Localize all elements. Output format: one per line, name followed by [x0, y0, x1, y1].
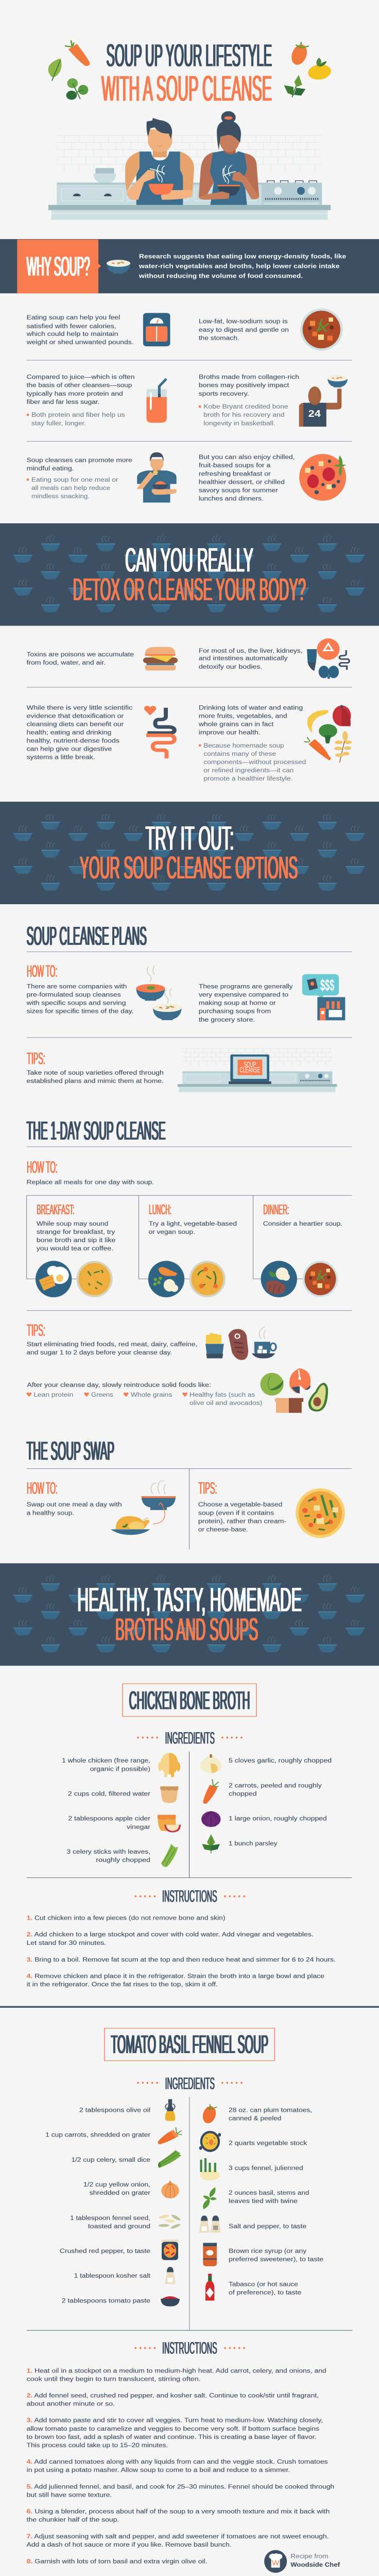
panel: swap how to: Swap out one meal a day with [27, 1501, 122, 1508]
instructions: 1. Cut chicken into a few pieces (do not remove bone and skin) [27, 1914, 225, 1921]
ingredient: fennel seed: toasted and ground [88, 2223, 150, 2230]
heading: instructions: INSTRUCTIONS [162, 2339, 217, 2358]
instructions [27, 1914, 314, 1946]
heading: ingredients: INGREDIENTS [165, 1729, 214, 1748]
text: compared to juice [27, 374, 134, 427]
ingredient: chicken [62, 1753, 180, 1777]
icon: vegetable yellow soup [190, 1261, 226, 1297]
ingredient: fennel seed: 1 tablespoon fennel seed, [70, 2214, 150, 2222]
icon: kale leaf [48, 58, 62, 81]
text: expensive: very expensive compared to [199, 991, 288, 998]
instructions: 6. Using a blender, process about half of the soup to a very smooth texture and mix it back with [27, 2507, 330, 2515]
ingredient: tomato paste [62, 2296, 180, 2307]
section: hero and why soup [0, 38, 379, 293]
instructions: 5. Add julienned fennel, and basil, and cook for 25–30 minutes. Fennel should be cooked through [27, 2483, 334, 2490]
banner: try it out: TRY IT OUT: [146, 820, 234, 857]
text: compared to juice: Compared to juice—which is often [27, 374, 134, 380]
text: expensive: making soup at home or [199, 999, 276, 1006]
instructions: allow tomato paste to caramelize and veggies to become very soft. If bottom surface begins [27, 2425, 320, 2432]
ingredient: carrots: 2 carrots, peeled and roughly [229, 1782, 322, 1789]
text: water, fruits, vegetables: Because homemade soup [203, 742, 284, 749]
text: broths: Broths made from collagen-rich [199, 374, 299, 380]
text: compared to juice: fiber and far less sugar. [27, 398, 99, 405]
banner: try it out [0, 802, 379, 904]
text: little scientific evidence: evidence that detoxification or [27, 712, 124, 719]
section: cleanse plans and 1-day cleanse [26, 965, 352, 1297]
banner: healthy tasty homemade [0, 1563, 379, 1666]
panel: swap how to: a healthy soup. [27, 1509, 74, 1516]
text: broths [199, 374, 299, 427]
text: little scientific evidence: health; eating and drinking [27, 729, 111, 736]
text: little scientific evidence [27, 704, 133, 761]
heading: ingredients [137, 1729, 243, 1748]
icon: vegetable soup [300, 309, 343, 351]
text: chilled soups: fruit-based soups for a [199, 462, 271, 469]
panel: breakfast: strange for breakfast, try [37, 1228, 115, 1235]
instructions continued: 4. Remove chicken and place it in the refrigerator. Strain the broth into a large bowl and place [27, 1972, 324, 1979]
text: chilled soups: savory soups for summer [199, 486, 278, 494]
text: satisfied [26, 314, 134, 346]
icon: chilled fruit soup [299, 454, 346, 501]
credit: woodside chef: W [272, 2560, 279, 2567]
text: water, fruits, vegetables: components—without processed [203, 758, 306, 766]
ingredient: carrots [203, 1779, 322, 1804]
instructions: 2. Add chicken to a large stockpot and cover with cold water. Add vinegar and vegetables. [27, 1931, 314, 1938]
text: chilled soups [199, 453, 295, 502]
illustration: woman eating soup [199, 111, 259, 205]
text: liver and kidneys: and intestines automatically [199, 655, 288, 662]
text: liver and kidneys: detoxify our bodies. [199, 663, 262, 670]
ingredient: onion [201, 1811, 327, 1827]
ingredient: salt and pepper: Salt and pepper, to taste [229, 2223, 306, 2230]
ingredient: olive oil: 2 tablespoons olive oil [79, 2106, 150, 2113]
panel: breakfast [37, 1201, 115, 1252]
recipe: tomato basil fennel soup [0, 1956, 379, 2272]
icon: fries, steak and coffee [205, 1327, 276, 1360]
panel: lunch: Try a light, vegetable-based [149, 1220, 237, 1227]
icon: lemon [306, 58, 333, 81]
ingredient: celery [71, 2150, 181, 2168]
text: little scientific evidence: While there is very little scientific [27, 704, 133, 711]
icon: cilantro [66, 78, 88, 100]
icon: vegetable soup [296, 1488, 345, 1538]
instructions continued: 3. Bring to a boil. Remove fat scum at the top and then reduce heat and simmer for 6 to 24 hours. [27, 1956, 336, 1963]
text: satisfied: weight or shed unwanted pounds. [26, 338, 134, 346]
panel: swap tips [198, 1479, 286, 1533]
icon: swap chicken for soup [111, 1481, 176, 1535]
icon: organs with recycle [307, 638, 349, 679]
ingredient: kosher salt: 1 tablespoon kosher salt [74, 2272, 150, 2279]
ingredient: garlic [200, 1754, 332, 1773]
text: water, fruits, vegetables: promote a healthier lifestyle. [203, 775, 292, 782]
icon: price bubble and store: $$$ [320, 976, 334, 994]
title box [123, 1684, 256, 1717]
text: reintroduce solid foods [26, 1381, 262, 1406]
instructions: cook until they begin to turn translucent, stirring often. [27, 2375, 201, 2382]
ingredient: onion: 1 large onion, roughly chopped [229, 1815, 327, 1822]
ingredient: celery: 1/2 cup celery, small dice [71, 2156, 150, 2163]
text: reintroduce solid foods: olive oil and avocados) [190, 1399, 262, 1406]
title box [105, 2028, 274, 2061]
ingredient: celery: roughly chopped [96, 1856, 150, 1863]
banner: can you really detox [0, 523, 379, 626]
ingredient: brown rice syrup: preferred sweetener), to taste [229, 2256, 323, 2263]
text: chilled soups: But you can also enjoy chilled, [199, 453, 295, 461]
instructions [27, 2367, 334, 2565]
icon: soup bowl [107, 260, 130, 274]
text: eliminate foods: Start eliminating fried foods, red meat, dairy, caffeine, [27, 1341, 197, 1348]
heading: ingredients: INGREDIENTS [165, 2074, 214, 2093]
ingredient: yellow onion [83, 2180, 179, 2198]
instructions: but still have some texture. [27, 2491, 112, 2498]
instructions: 4. Add canned tomatoes along with any liquids from can and the veggie stock. Crush tomatoes [27, 2458, 328, 2465]
instructions: 3. Add tomato paste and stir to cover all veggies. Turn heat to medium-low. Watching closely, [27, 2417, 323, 2424]
icon: heart and digestive tract [144, 706, 175, 758]
text: broths: bones may positively impact [199, 382, 289, 389]
text: research: without reducing the volume of food consumed. [139, 273, 303, 279]
text: easy to digest: the stomach. [199, 334, 239, 342]
panel: dinner: DINNER: [263, 1201, 289, 1217]
text: reintroduce solid foods: Lean protein [33, 1391, 73, 1398]
text: little scientific evidence: can help give our digestive [27, 745, 112, 752]
text: easy to digest: easy to digest and gentle on [199, 326, 289, 333]
text: broths: Kobe Bryant credited bone [203, 403, 288, 410]
instructions: Let stand for 30 minutes. [27, 1939, 106, 1946]
icon: price bubble and store [302, 974, 345, 1020]
ingredient: olive oil [79, 2099, 175, 2121]
icon: scale [143, 313, 170, 346]
text: liver and kidneys [199, 647, 303, 670]
icon: egg and toast plate [36, 1261, 72, 1297]
panel: breakfast: you would tea or coffee. [37, 1245, 113, 1252]
text: reintroduce solid foods: Healthy fats (such as [190, 1391, 255, 1398]
panel: swap tips: TIPS: [198, 1479, 217, 1498]
text: toxins [27, 651, 134, 666]
panel: breakfast: While soup may sound [37, 1220, 108, 1227]
credit: woodside chef: Recipe from [290, 2553, 329, 2560]
ingredient: plum tomatoes: 28 oz. can plum tomatoes, [229, 2106, 312, 2113]
text: eliminate foods [27, 1341, 197, 1356]
text: companies: with specific soups and serving [26, 999, 126, 1006]
icon: tomato [289, 42, 309, 66]
icon: burger [143, 647, 178, 670]
text: companies: pre-formulated soup cleanses [27, 991, 121, 998]
text: satisfied: Eating soup can help you feel [27, 314, 120, 321]
text: mindful eating: all meals can help reduce [31, 484, 110, 492]
icon: steak and cauliflower plate [261, 1261, 297, 1297]
text: companies [26, 982, 134, 1015]
panel: lunch: or vegan soup. [149, 1228, 195, 1235]
illustration: laptop in kitchen: CLEANSE [240, 1066, 260, 1074]
text: reintroduce solid foods: After your cleanse day, slowly reintroduce solid foods like: [27, 1381, 211, 1388]
text: broths: longevity in basketball. [203, 419, 275, 427]
text: compared to juice: typically has more protein and [27, 390, 123, 397]
text: mindful eating: Eating soup for one meal or [31, 476, 118, 483]
panel: swap how to [27, 1479, 122, 1516]
icon: hearty soup [303, 1261, 338, 1297]
panel: lunch: LUNCH: [149, 1201, 171, 1217]
ingredient: celery: 3 celery sticks with leaves, [67, 1848, 150, 1855]
ingredient: carrots [45, 2127, 182, 2144]
text: water, fruits, vegetables: improve our health. [199, 729, 261, 736]
text: research [139, 252, 346, 279]
panel: why soup: WHY SOUP? [27, 251, 90, 282]
panel: swap how to: HOW TO: [27, 1479, 57, 1498]
heading: ingredients [137, 2074, 243, 2093]
ingredient: garlic: 5 cloves garlic, roughly chopped [229, 1757, 332, 1764]
illustration: laptop in kitchen: SOUP [244, 1061, 256, 1069]
text: companies: There are some companies with [27, 982, 127, 990]
text: chilled soups: healthier dessert, or chilled [199, 478, 285, 485]
text: little scientific evidence: systems a little break. [27, 754, 95, 761]
text: reintroduce solid foods: Greens [91, 1391, 113, 1398]
panel: lunch [149, 1201, 237, 1235]
ingredient: tabasco: of preference), to taste [229, 2289, 301, 2296]
credit: woodside chef [264, 2550, 340, 2573]
ingredient: basil: leaves tied with twine [229, 2197, 298, 2205]
ingredient: celery [67, 1844, 178, 1867]
icon: man snacking [137, 452, 177, 503]
text: chilled soups: refreshing breakfast or [199, 470, 271, 477]
ingredient: water [68, 1786, 178, 1803]
text: little scientific evidence: cleansing diets can benefit our [27, 720, 124, 727]
title [101, 38, 272, 109]
section: detox facts [0, 638, 379, 980]
ingredient: carrots: chopped [229, 1790, 257, 1797]
text: expensive: These programs are generally [199, 982, 293, 990]
ingredient: fennel seed [70, 2214, 181, 2230]
text: water, fruits, vegetables: more fruits, vegetables, and [199, 712, 287, 719]
ingredient: brown rice syrup [203, 2243, 323, 2266]
ingredient: chicken: 1 whole chicken (free range, [62, 1757, 150, 1764]
instructions continued: it in the refrigerator. Once the fat rises to the top, skim it off. [27, 1981, 218, 1988]
icon: yellow soup [76, 1261, 113, 1297]
text: take note: Take note of soup varieties offered through [27, 1069, 164, 1076]
panel: swap tips: soup (even if it contains [198, 1509, 274, 1516]
text: toxins: Toxins are poisons we accumulate [27, 651, 134, 658]
text: broths: broth for his recovery and [203, 411, 284, 418]
credit: woodside chef: Woodside Chef [290, 2561, 340, 2568]
section: why soup benefits [0, 309, 379, 626]
instructions: 8. Garnish with lots of torn basil and extra virgin olive oil. [27, 2557, 208, 2565]
panel: why soup [0, 239, 379, 293]
text: companies: sizes for specific times of the day. [27, 1008, 134, 1015]
illustration: laptop in kitchen [178, 1048, 337, 1092]
icon: fruit, vegetables and grain [304, 705, 352, 762]
panel: dinner [263, 1201, 342, 1227]
text: mindful eating: mindful eating. [27, 465, 74, 472]
text: water, fruits, vegetables: whole grains can in fact [198, 720, 274, 727]
text: water, fruits, vegetables: Drinking lots of water and eating [199, 704, 303, 711]
section: detox facts: SOUP CLEANSE PLANS [27, 921, 147, 951]
ingredient: brown rice syrup: Brown rice syrup (or any [229, 2247, 307, 2255]
text: water, fruits, vegetables [198, 704, 306, 782]
panel: breakfast: bone broth and sip it like [37, 1236, 115, 1244]
instructions: 2. Add fennel seed, crushed red pepper, and kosher salt. Continue to cook/stir until fragrant, [27, 2392, 319, 2399]
recipe: chicken bone broth [27, 1684, 352, 1946]
heading: instructions [134, 1887, 245, 1906]
ingredient: fennel [200, 2158, 303, 2180]
ingredient: tomato paste: 2 tablespoons tomato paste [62, 2297, 150, 2304]
ingredient: crushed red pepper [60, 2240, 178, 2260]
section: cleanse plans and 1-day cleanse: HOW TO: [27, 1158, 57, 1177]
text: water, fruits, vegetables: contains many of these [203, 750, 276, 757]
text: take note [27, 1069, 164, 1084]
text: mindful eating [27, 456, 132, 500]
panel: swap tips: protein), rather than cream- [198, 1517, 286, 1524]
text: replace all meals: Replace all meals for one day with soup. [27, 1179, 154, 1185]
section: tips and soup swap [0, 1311, 379, 1666]
ingredient: parsley: 1 bunch parsley [229, 1840, 278, 1847]
text: easy to digest [199, 318, 289, 342]
ingredient: basil [203, 2187, 309, 2209]
text: eliminate foods: and sugar 1 to 2 days before your cleanse day. [27, 1349, 172, 1356]
icon: chicken and peas plate [148, 1261, 184, 1297]
instructions: to brown too fast, add a splash of water and continue. This is creating a base layer of flavor. [27, 2433, 316, 2441]
text: take note: established plans and mimic them at home. [27, 1077, 164, 1084]
heading: instructions [134, 2339, 245, 2358]
icon: healthy foods [261, 1368, 328, 1413]
ingredient: crushed red pepper: Crushed red pepper, to taste [60, 2247, 150, 2255]
text: easy to digest: Low-fat, low-sodium soup is [199, 318, 288, 325]
text: research: Research suggests that eating low energy-density foods, like [139, 252, 346, 260]
section: tips and soup swap: TIPS: [27, 1321, 45, 1340]
ingredient: apple cider vinegar: 2 tablespoons apple cider [68, 1815, 151, 1822]
text: satisfied: satisfied with fewer calories, [27, 323, 116, 330]
text: expensive: the grocery store. [199, 1016, 255, 1023]
panel: breakfast: BREAKFAST: [37, 1201, 74, 1217]
ingredient: carrots: 1 cup carrots, shredded on grater [45, 2131, 151, 2138]
ingredient: basil: 2 ounces basil, stems and [229, 2189, 309, 2196]
instructions: Add a dash of hot sauce or more if you like. Remove basil bunch. [27, 2541, 232, 2548]
panel: swap tips: or cheese-base. [198, 1526, 248, 1533]
icon: carrot [65, 40, 90, 66]
ingredient: kosher salt [74, 2267, 176, 2284]
ingredient: salt and pepper [199, 2215, 306, 2233]
ingredient: chicken: organic if possible) [90, 1765, 150, 1772]
instructions: in pot using a potato masher. Allow soup to come to a boil and reduce to a simmer. [27, 2466, 290, 2473]
text: expensive [199, 982, 293, 1023]
instructions: 1. Heat oil in a stockpot on a medium to medium-high heat. Add carrot, celery, and onions, and [27, 2367, 326, 2374]
panel: swap tips: Choose a vegetable-based [198, 1501, 282, 1508]
icon: juice glass [146, 379, 167, 422]
kitchen scene [48, 135, 331, 220]
icon: two soup bowls [136, 965, 182, 1020]
icon: basketball player [299, 375, 348, 427]
text: expensive: purchasing soups from [199, 1008, 271, 1015]
section: tips and soup swap: THE SOUP SWAP [27, 1436, 114, 1465]
ingredient: apple cider vinegar [68, 1815, 181, 1833]
text: compared to juice: the basis of other cleanses—soup [27, 382, 132, 389]
text: compared to juice: stay fuller, longer. [31, 419, 86, 427]
text: broths: sports recovery. [199, 390, 249, 397]
text: liver and kidneys: For most of us, the liver, kidneys, [199, 647, 303, 654]
panel: dinner: Consider a heartier soup. [263, 1220, 342, 1227]
ingredient: apple cider vinegar: vinegar [127, 1823, 151, 1831]
instructions: the chunkier half of the soup. [27, 2516, 119, 2523]
text: compared to juice: Both protein and fiber help us [31, 411, 125, 418]
ingredient: tabasco [205, 2274, 301, 2300]
ingredient: yellow onion: 1/2 cup yellow onion, [83, 2181, 150, 2188]
instructions continued [27, 1956, 336, 1988]
instructions: This process could take up to 15–20 minutes. [27, 2442, 168, 2449]
text: little scientific evidence: healthy, nutrient-dense foods [27, 737, 119, 744]
ingredient: vegetable stock [199, 2131, 307, 2152]
text: water, fruits, vegetables: or refined ingredients—it can [203, 767, 294, 774]
ingredient: plum tomatoes: canned & peeled [229, 2114, 281, 2122]
ingredient: parsley [202, 1834, 278, 1853]
ingredient: yellow onion: shredded on grater [90, 2189, 151, 2196]
ingredient: plum tomatoes [201, 2104, 312, 2124]
text: satisfied: which could help to maintain [26, 330, 118, 337]
text: chilled soups: lunches and dinners. [199, 495, 264, 502]
icon: basketball player: 24 [308, 409, 321, 419]
text: toxins: from food, water, and air. [27, 659, 106, 666]
ingredient: tabasco: Tabasco (or hot sauce [229, 2280, 298, 2287]
icon: parsley [284, 75, 305, 97]
text: research: water-rich vegetables and broths, help lower calorie intake [139, 263, 340, 269]
heading: instructions: INSTRUCTIONS [162, 1887, 217, 1906]
ingredient: water: 2 cups cold, filtered water [68, 1790, 151, 1797]
ingredient: vegetable stock: 2 quarts vegetable stock [229, 2140, 307, 2146]
section: detox facts: HOW TO: [27, 962, 57, 980]
text: reintroduce solid foods: Whole grains [131, 1391, 173, 1398]
ingredient: fennel: 3 cups fennel, julienned [229, 2164, 303, 2172]
instructions: about another minute or so. [27, 2400, 115, 2407]
text: mindful eating: Soup cleanses can promote more [27, 456, 132, 464]
recipe: tomato soup instructions [0, 2267, 379, 2576]
instructions: 7. Adjust seasoning with salt and pepper, and add sweetener if tomatoes are not sweet enough. [27, 2533, 329, 2540]
illustration: man eating soup [125, 118, 194, 205]
section: cleanse plans and 1-day cleanse: TIPS: [27, 1049, 45, 1068]
text: mindful eating: mindless snacking. [31, 493, 90, 500]
